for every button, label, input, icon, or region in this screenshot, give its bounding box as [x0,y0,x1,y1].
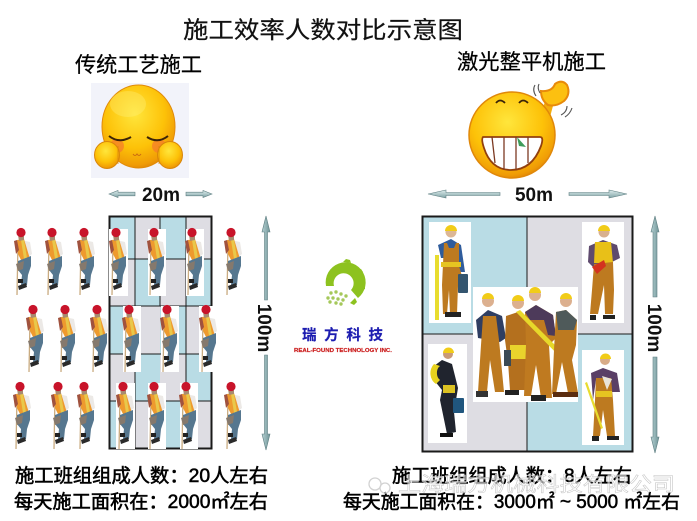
caption: laser screed crew and area [343,465,680,513]
worker photo: group of four [473,287,578,402]
heading: laser screed process: 激光整平机施工 [457,51,606,74]
panel: traditional construction grid [109,216,212,449]
arrows and label: 20m width: 20m [142,185,180,206]
caption: traditional crew and area: 施工班组组成人数：20人左右 [15,465,268,487]
panel: laser screed grid [422,216,633,452]
workers: twenty-person crew [13,228,242,449]
worker photo: top right [582,222,624,323]
worker photo: bottom left [428,344,467,443]
icon: sad shy smiley [91,83,189,178]
worker photo: bottom right [582,350,624,445]
icon: laughing smiley with thumbs up [469,82,572,178]
caption: traditional crew and area [14,465,268,513]
arrows and label: 50m width: 50m [515,185,553,206]
caption: laser screed crew and area: 每天施工面积在：3000㎡ ~ 5000 ㎡左右 [343,490,680,513]
worker photo: top left [429,222,471,323]
caption: traditional crew and area: 每天施工面积在：2000㎡左右 [14,490,268,513]
logo: Real-Found Technology: REAL-FOUND TECHNOLOGY INC. [294,348,393,354]
logo: Real-Found Technology [294,259,393,354]
caption: laser screed crew and area: 施工班组组成人数：8人左右 [392,465,632,487]
watermark: company name: 上海瑞方机械科技有限公司 [398,473,675,496]
arrows and label: 100m left: 100m [253,304,274,352]
arrows and label: 100m right: 100m [643,304,664,352]
arrows and label: 100m left [253,216,274,450]
arrows and label: 20m width [109,185,212,206]
arrows and label: 100m right [643,216,664,453]
title: 施工效率人数对比示意图 [183,17,463,43]
white backing cards behind workers in grid [109,229,213,449]
heading: traditional process: 传统工艺施工 [75,54,202,77]
arrows and label: 50m width [428,185,627,206]
logo: Real-Found Technology: 瑞方科技 [302,326,384,344]
